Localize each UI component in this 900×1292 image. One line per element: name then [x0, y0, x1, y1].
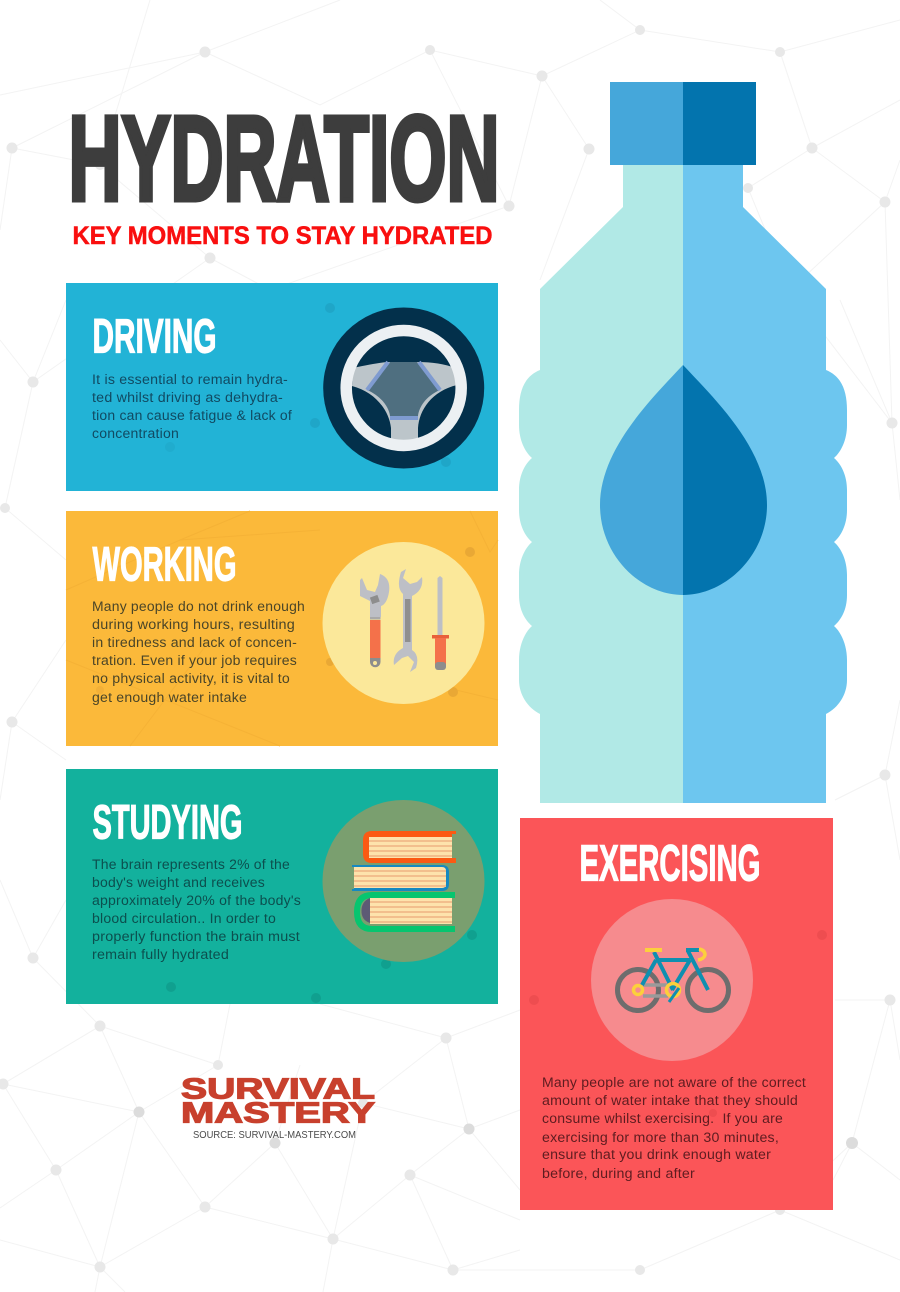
panel: working [66, 511, 498, 746]
text: studying: blood circulation.. In order to [92, 911, 276, 926]
text: working: get enough water intake [92, 690, 247, 705]
text: working: in tiredness and lack of concen- [92, 635, 297, 650]
text: exercising: exercising for more than 30 minutes, [542, 1130, 779, 1145]
text: driving: concentration [92, 426, 179, 441]
text: working: Many people do not drink enough [92, 599, 305, 614]
text: exercising: consume whilst exercising. If you are [542, 1111, 783, 1126]
text: studying: properly function the brain must [92, 929, 300, 944]
icon: water drop [600, 365, 767, 595]
text: studying: approximately 20% of the body's [92, 893, 301, 908]
icon: steering wheel [323, 308, 484, 468]
panel: driving [66, 283, 498, 491]
logo: survival mastery: MASTERY [181, 1098, 375, 1130]
text: exercising: Many people are not aware of the correct [542, 1075, 806, 1090]
text: working: no physical activity, it is vital to [92, 671, 290, 686]
water bottle [519, 82, 847, 803]
text: exercising: before, during and after [542, 1166, 695, 1181]
text: studying: The brain represents 2% of the [92, 857, 290, 872]
source line: SOURCE: SURVIVAL-MASTERY.COM [193, 1129, 356, 1141]
icon: books [322, 800, 484, 962]
logo: survival mastery [181, 1074, 375, 1130]
heading: driving: DRIVING [92, 310, 216, 364]
heading: working: WORKING [92, 538, 236, 592]
text: exercising: amount of water intake that they should [542, 1093, 798, 1108]
heading: exercising: EXERCISING [580, 834, 760, 892]
text: driving: It is essential to remain hydra- [92, 372, 288, 387]
text: driving: ted whilst driving as dehydra- [92, 390, 283, 405]
panel: exercising [520, 818, 833, 1210]
text: studying [92, 857, 301, 962]
text: driving: tion can cause fatigue & lack of [92, 408, 292, 423]
text: working [92, 599, 305, 705]
icon: bicycle [591, 899, 753, 1061]
title: HYDRATION [68, 90, 500, 226]
text: working: tration. Even if your job requires [92, 653, 297, 668]
text: exercising: ensure that you drink enough water [542, 1147, 771, 1162]
text: studying: body's weight and receives [92, 875, 265, 890]
text: working: during working hours, resulting [92, 617, 295, 632]
text: exercising [542, 1075, 806, 1181]
panel: studying [66, 769, 498, 1004]
heading: studying: STUDYING [92, 796, 242, 850]
text: driving [92, 372, 292, 441]
icon: tools [322, 542, 484, 704]
text: studying: remain fully hydrated [92, 947, 229, 962]
logo: survival mastery: SURVIVAL [181, 1074, 375, 1106]
subtitle: KEY MOMENTS TO STAY HYDRATED [72, 222, 492, 250]
